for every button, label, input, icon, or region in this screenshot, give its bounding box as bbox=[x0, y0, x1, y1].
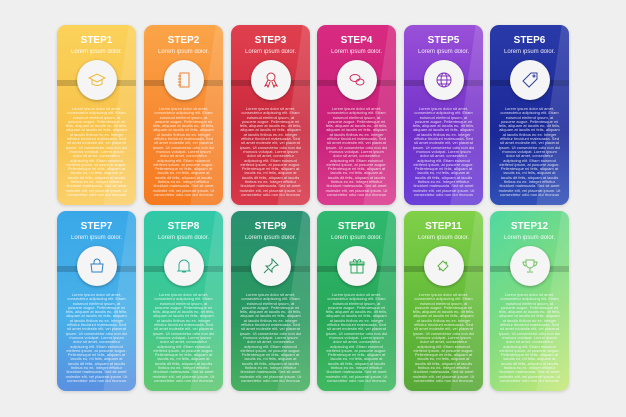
icon: award bbox=[250, 60, 290, 100]
icon: gift bbox=[336, 246, 376, 286]
heading: STEP2 bbox=[168, 35, 199, 46]
card: step 1: Lorem ipsum dolor. bbox=[71, 49, 122, 55]
icon: pin bbox=[250, 246, 290, 286]
card: step 12: Lorem ipsum dolor. bbox=[504, 235, 555, 241]
card: step 8: Lorem ipsum dolor. bbox=[158, 235, 209, 241]
heading: STEP8 bbox=[168, 221, 199, 232]
icon: chat bubbles bbox=[336, 60, 376, 100]
card: step 6 bbox=[490, 25, 569, 205]
heading: STEP4 bbox=[341, 35, 372, 46]
icon: notebook bbox=[164, 60, 204, 100]
heading: STEP11 bbox=[425, 221, 462, 232]
card: step 9 bbox=[231, 211, 310, 391]
heading: STEP12 bbox=[511, 221, 548, 232]
icon: graduation cap bbox=[76, 60, 116, 100]
card: step 4: Lorem ipsum dolor. bbox=[331, 49, 382, 55]
card: step 12 bbox=[490, 211, 569, 391]
card: step 10: Lorem ipsum dolor. bbox=[331, 235, 382, 241]
card: step 7 bbox=[57, 211, 136, 391]
heading: STEP5 bbox=[428, 35, 459, 46]
card: step 8 bbox=[144, 211, 223, 391]
card: step 3 bbox=[231, 25, 310, 205]
heading: STEP10 bbox=[338, 221, 375, 232]
icon: trophy bbox=[510, 246, 550, 286]
icon: globe bbox=[424, 60, 464, 100]
heading: STEP7 bbox=[81, 221, 112, 232]
card: step 2 bbox=[144, 25, 223, 205]
heading: STEP6 bbox=[514, 35, 545, 46]
heading: STEP3 bbox=[255, 35, 286, 46]
icon: bag bbox=[76, 246, 116, 286]
card: step 11: Lorem ipsum dolor. bbox=[418, 235, 469, 241]
heading: STEP1 bbox=[81, 35, 112, 46]
card: step 4 bbox=[317, 25, 396, 205]
card: step 5 bbox=[404, 25, 483, 205]
card: step 3: Lorem ipsum dolor. bbox=[245, 49, 296, 55]
heading: STEP9 bbox=[255, 221, 286, 232]
card: step 11 bbox=[404, 211, 483, 391]
icon: bell bbox=[164, 246, 204, 286]
icon: tag bbox=[510, 60, 550, 100]
card: step 5: Lorem ipsum dolor. bbox=[418, 49, 469, 55]
card: step 7: Lorem ipsum dolor. bbox=[71, 235, 122, 241]
card: step 2: Lorem ipsum dolor. bbox=[158, 49, 209, 55]
icon: puzzle bbox=[424, 246, 464, 286]
card: step 10 bbox=[317, 211, 396, 391]
card: step 9: Lorem ipsum dolor. bbox=[245, 235, 296, 241]
card: step 6: Lorem ipsum dolor. bbox=[504, 49, 555, 55]
card: step 1 bbox=[57, 25, 136, 205]
